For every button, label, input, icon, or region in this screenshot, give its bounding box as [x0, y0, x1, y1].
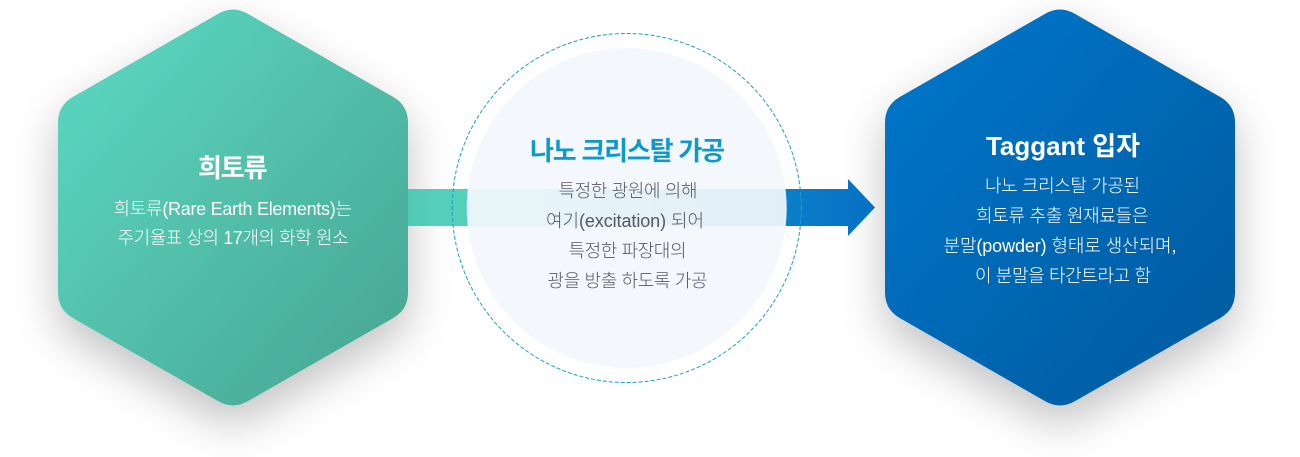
panel: nano crystal processing circle [452, 34, 801, 382]
hexagon: blue background [885, 10, 1235, 405]
text: rare earth description: 주기율표 상의 17개의 화학 원소 [118, 228, 348, 248]
text: taggant description: 이 분말을 타간트라고 함 [975, 266, 1151, 286]
arrow: process flow [408, 179, 875, 236]
heading: rare earth: 희토류 [198, 153, 268, 183]
panel: rare earth hexagon [58, 10, 408, 405]
text: processing description [546, 181, 708, 291]
circle: inner fill [467, 48, 787, 368]
text: taggant description: 분말(powder) 형태로 생산되며, [944, 236, 1176, 256]
text: taggant description: 희토류 추출 원재료들은 [976, 206, 1148, 226]
text: rare earth description [114, 199, 352, 248]
text: processing description: 여기(excitation) 되어 [546, 211, 704, 231]
text: taggant description [944, 176, 1176, 286]
circle: dashed outline [452, 34, 801, 382]
text: rare earth description: 희토류(Rare Earth Elements)는 [114, 199, 352, 219]
heading: nano crystal processing: 나노 크리스탈 가공 [530, 136, 725, 166]
hexagon: teal background [58, 10, 408, 405]
text: processing description: 특정한 광원에 의해 [558, 181, 698, 201]
heading: taggant particles: Taggant 입자 [986, 131, 1140, 161]
text: taggant description: 나노 크리스탈 가공된 [985, 176, 1140, 196]
text: processing description: 특정한 파장대의 [568, 241, 686, 261]
panel: taggant hexagon [885, 10, 1235, 405]
text: processing description: 광을 방출 하도록 가공 [548, 271, 708, 291]
